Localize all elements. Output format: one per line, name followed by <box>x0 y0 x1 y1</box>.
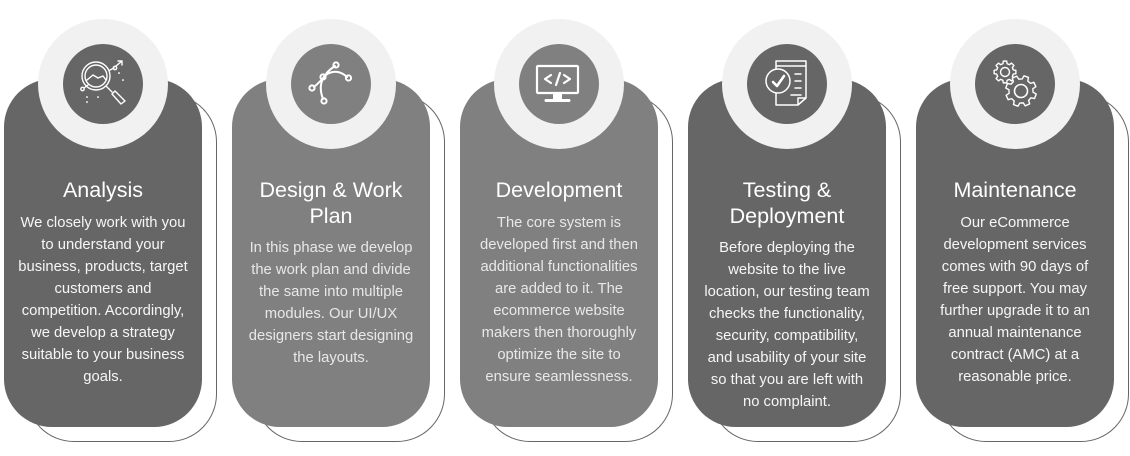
icon: gears <box>950 19 1080 149</box>
text block: reasonable price. <box>958 369 1072 385</box>
text block: ensure seamlessness. <box>485 369 633 385</box>
text block: website to the live <box>728 262 846 278</box>
text block: Our eCommerce <box>960 215 1070 231</box>
icon: checklist document <box>722 19 852 149</box>
text block: the same into multiple <box>259 284 403 300</box>
text block: security, compatibility, <box>716 328 858 344</box>
text block: The core system is <box>497 215 621 231</box>
heading: Development <box>496 178 622 202</box>
text block: suitable to your business <box>22 347 184 363</box>
text block: Before deploying the <box>719 240 855 256</box>
panel: development <box>460 19 673 442</box>
text block: goals. <box>83 369 123 385</box>
text block <box>249 240 413 366</box>
text block: the layouts. <box>293 350 369 366</box>
text block: and usability of your site <box>708 350 866 366</box>
text block: development services <box>943 237 1087 253</box>
text block: checks the functionality, <box>709 306 865 322</box>
text block: further upgrade it to an <box>940 303 1090 319</box>
icon: monitor with code <box>494 19 624 149</box>
text block: are added to it. The <box>495 281 623 297</box>
heading <box>260 178 402 228</box>
text block <box>940 215 1090 385</box>
text block: free support. You may <box>943 281 1087 297</box>
heading: Plan <box>309 204 353 228</box>
text block: we develop a strategy <box>31 325 175 341</box>
icon: bezier curve <box>266 19 396 149</box>
text block: designers start designing <box>249 328 413 344</box>
panel: maintenance <box>916 19 1129 442</box>
text block: optimize the site to <box>497 347 621 363</box>
text block: so that you are left with <box>711 372 863 388</box>
text block <box>18 215 188 385</box>
text block: comes with 90 days of <box>942 259 1088 275</box>
text block: competition. Accordingly, <box>22 303 184 319</box>
text block: no complaint. <box>743 394 831 410</box>
heading <box>730 178 844 228</box>
text block: We closely work with you <box>20 215 186 231</box>
icon: magnifier with chart <box>38 19 168 149</box>
heading: Design & Work <box>260 178 402 202</box>
text block <box>704 240 870 410</box>
text block: the work plan and divide <box>251 262 411 278</box>
text block: modules. Our UI/UX <box>265 306 397 322</box>
text block: location, our testing team <box>704 284 870 300</box>
text block: makers then thoroughly <box>482 325 636 341</box>
text block: business, products, target <box>18 259 188 275</box>
heading: Testing & <box>743 178 831 202</box>
text block: developed first and then <box>480 237 638 253</box>
heading: Maintenance <box>953 178 1077 202</box>
text block: additional functionalities <box>480 259 638 275</box>
heading: Deployment <box>730 204 844 228</box>
text block: annual maintenance <box>948 325 1082 341</box>
text block: In this phase we develop <box>250 240 412 256</box>
panel: testing and deployment <box>688 19 901 442</box>
text block: ecommerce website <box>493 303 625 319</box>
text block: customers and <box>54 281 152 297</box>
text block: contract (AMC) at a <box>951 347 1079 363</box>
heading: Analysis <box>63 178 143 202</box>
panel: design and work plan <box>232 19 445 442</box>
text block <box>480 215 638 385</box>
text block: to understand your <box>41 237 165 253</box>
panel: analysis <box>4 19 217 442</box>
